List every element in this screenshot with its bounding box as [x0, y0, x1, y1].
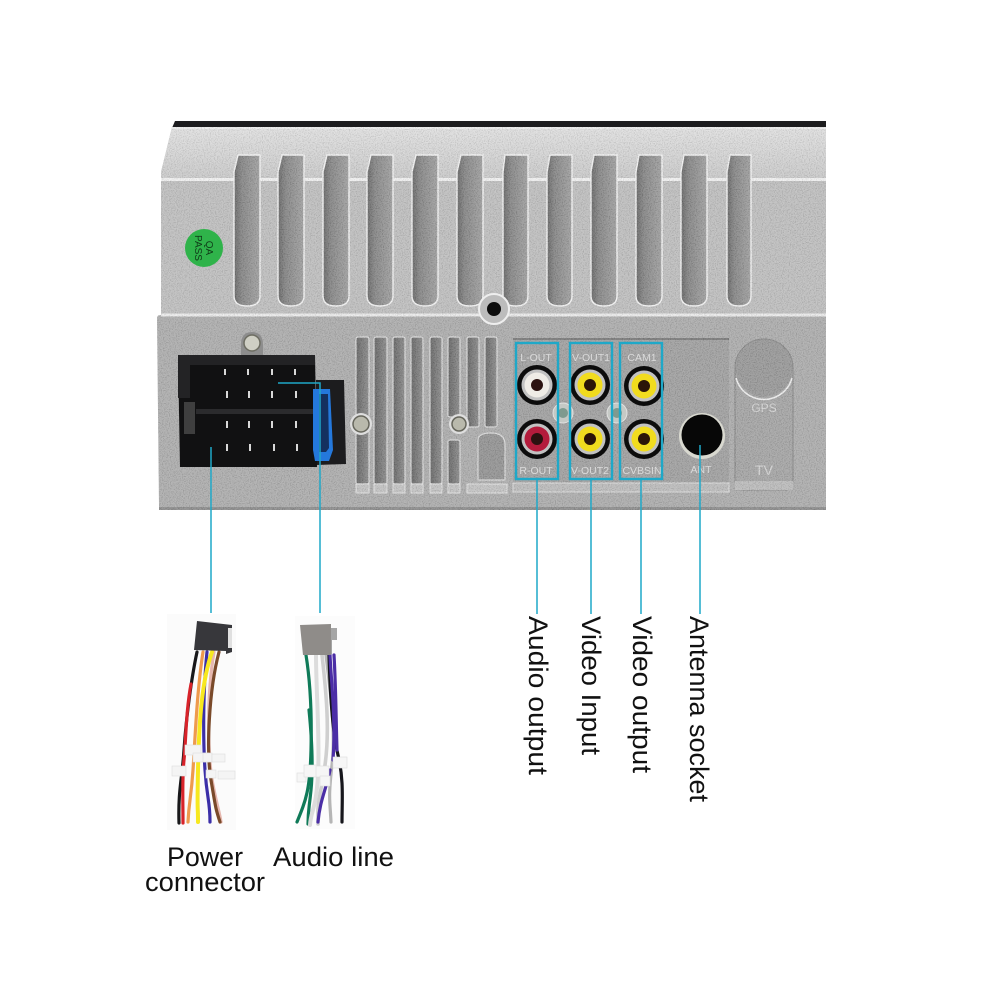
- wire tags: [172, 745, 235, 779]
- power connector harness: [167, 614, 236, 830]
- RCA recess: [513, 339, 729, 492]
- jack: R-out red: [517, 419, 557, 459]
- ISO connector block: [178, 355, 346, 467]
- embossed port labels: [519, 352, 712, 477]
- label: audio output: Audio output: [523, 616, 553, 776]
- jack: V-out2 yellow: [570, 419, 610, 459]
- label: audio line: Audio line: [273, 842, 394, 872]
- label: video input: Video Input: [576, 616, 606, 756]
- mounting hole: [479, 294, 509, 324]
- sticker: QA pass: [185, 229, 223, 267]
- fuse holder: [316, 380, 346, 465]
- top dark edge: [172, 121, 826, 130]
- jack: V-out1 yellow: [570, 365, 610, 405]
- grille bottom lip: [356, 484, 507, 493]
- blue fuse: [313, 389, 333, 461]
- GPS and TV knockout: GPS: [751, 401, 777, 415]
- audio line harness: [295, 616, 355, 829]
- connector housing: [178, 355, 317, 467]
- embossed port labels: R-OUT: [519, 465, 553, 477]
- label: antenna socket: Antenna socket: [684, 616, 714, 802]
- port group outlines: [516, 343, 662, 479]
- jack: L-out white: [517, 365, 557, 405]
- jack: CVBS yellow: [624, 419, 664, 459]
- connector plug: [300, 624, 331, 655]
- connector plug: [194, 621, 232, 654]
- embossed port labels: CVBSIN: [622, 465, 662, 477]
- RCA jacks: [517, 365, 725, 459]
- connector pins: [224, 369, 298, 451]
- screws: [241, 332, 627, 435]
- label: video output: Video output: [627, 616, 657, 774]
- embossed port labels: CAM1: [627, 352, 657, 364]
- embossed port labels: V-OUT2: [571, 465, 609, 477]
- sticker: QA pass: PASS: [192, 235, 203, 261]
- embossed port labels: ANT: [690, 464, 712, 476]
- jack: CAM yellow: [624, 366, 664, 406]
- ventilation grille: [356, 337, 505, 484]
- embossed port labels: L-OUT: [520, 352, 552, 364]
- leader lines: [211, 383, 700, 614]
- wires: [297, 655, 342, 825]
- sticker: QA pass: QA: [203, 241, 214, 256]
- wires: [179, 652, 221, 823]
- label: power connector: Power: [167, 842, 243, 872]
- antenna socket: [679, 413, 725, 459]
- metal speckle texture: [157, 127, 826, 510]
- label: power connector: [145, 842, 265, 897]
- embossed port labels: V-OUT1: [572, 352, 610, 364]
- cooling slots: [234, 155, 751, 306]
- head unit rear panel: [157, 121, 826, 510]
- upper heat-sink housing: [161, 127, 826, 316]
- label: power connector: connector: [145, 867, 265, 897]
- infographic canvas: [146, 121, 826, 892]
- wire tags: [297, 757, 347, 786]
- GPS and TV knockout: TV: [755, 462, 774, 478]
- lower connector plate: [157, 315, 826, 510]
- GPS and TV knockout: [735, 339, 793, 490]
